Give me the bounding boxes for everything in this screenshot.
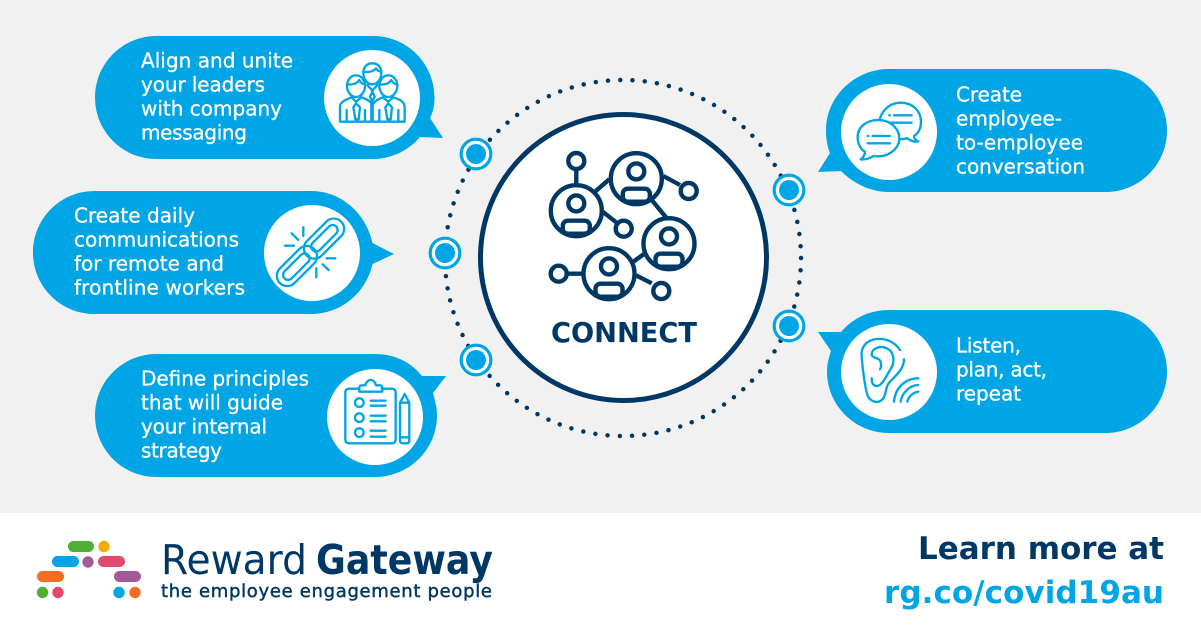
logo: reward gateway mark bbox=[37, 541, 141, 598]
node: upper right bbox=[774, 175, 804, 205]
text: define principles: your internal bbox=[141, 414, 267, 438]
heading: connect: CONNECT bbox=[551, 317, 697, 349]
text: listen bbox=[956, 334, 1047, 406]
node: upper left bbox=[461, 139, 491, 169]
node: lower left bbox=[461, 345, 491, 375]
panel: conversation callout bbox=[818, 69, 1167, 192]
text: daily communications bbox=[74, 204, 245, 300]
text: conversation: conversation bbox=[956, 154, 1085, 178]
text: define principles: that will guide bbox=[141, 390, 283, 414]
call to action text: Learn more at bbox=[918, 531, 1164, 567]
footer panel bbox=[0, 513, 1201, 628]
text: daily communications: for remote and bbox=[74, 252, 224, 276]
call to action text: rg.co/covid19au bbox=[884, 575, 1164, 611]
icon: ear and sound waves bbox=[841, 324, 937, 420]
text: align leaders: messaging bbox=[141, 120, 247, 144]
text: define principles bbox=[141, 366, 309, 462]
text: align leaders: with company bbox=[141, 96, 282, 120]
panel: listen callout bbox=[818, 310, 1167, 433]
text: align leaders: Align and unite bbox=[141, 48, 293, 72]
icon: broken chain link bbox=[264, 205, 360, 301]
logo: wordmark bbox=[161, 536, 493, 602]
text: define principles: Define principles bbox=[141, 366, 309, 390]
node: middle left bbox=[430, 238, 460, 268]
dotted ring bbox=[445, 80, 801, 436]
text: listen: repeat bbox=[956, 382, 1021, 406]
text: daily communications: communications bbox=[74, 228, 239, 252]
text: conversation: employee- bbox=[956, 106, 1062, 130]
text: conversation: Create bbox=[956, 82, 1022, 106]
text: align leaders: your leaders bbox=[141, 72, 265, 96]
panel: central connect circle bbox=[480, 114, 766, 400]
icon: connected people network bbox=[551, 153, 697, 299]
text: listen: Listen, bbox=[956, 334, 1021, 358]
panel: define principles callout bbox=[95, 354, 446, 477]
panel: daily communications callout bbox=[33, 191, 394, 314]
icon: chat bubbles bbox=[841, 84, 937, 180]
text: daily communications: frontline workers bbox=[74, 276, 245, 300]
text: daily communications: Create daily bbox=[74, 204, 195, 228]
logo: wordmark: Gateway bbox=[316, 536, 493, 584]
text: align leaders bbox=[141, 48, 293, 144]
panel: align leaders callout bbox=[95, 36, 443, 159]
logo: wordmark: Reward bbox=[161, 536, 307, 584]
node: lower right bbox=[774, 311, 804, 341]
text: listen: plan, act, bbox=[956, 358, 1047, 382]
icon: leaders group bbox=[324, 50, 420, 146]
text: conversation: to-employee bbox=[956, 130, 1083, 154]
call to action text bbox=[884, 531, 1164, 611]
logo: wordmark: the employee engagement people bbox=[161, 581, 492, 602]
text: define principles: strategy bbox=[141, 438, 222, 462]
icon: clipboard and pencil bbox=[327, 369, 423, 465]
text: conversation bbox=[956, 82, 1085, 178]
